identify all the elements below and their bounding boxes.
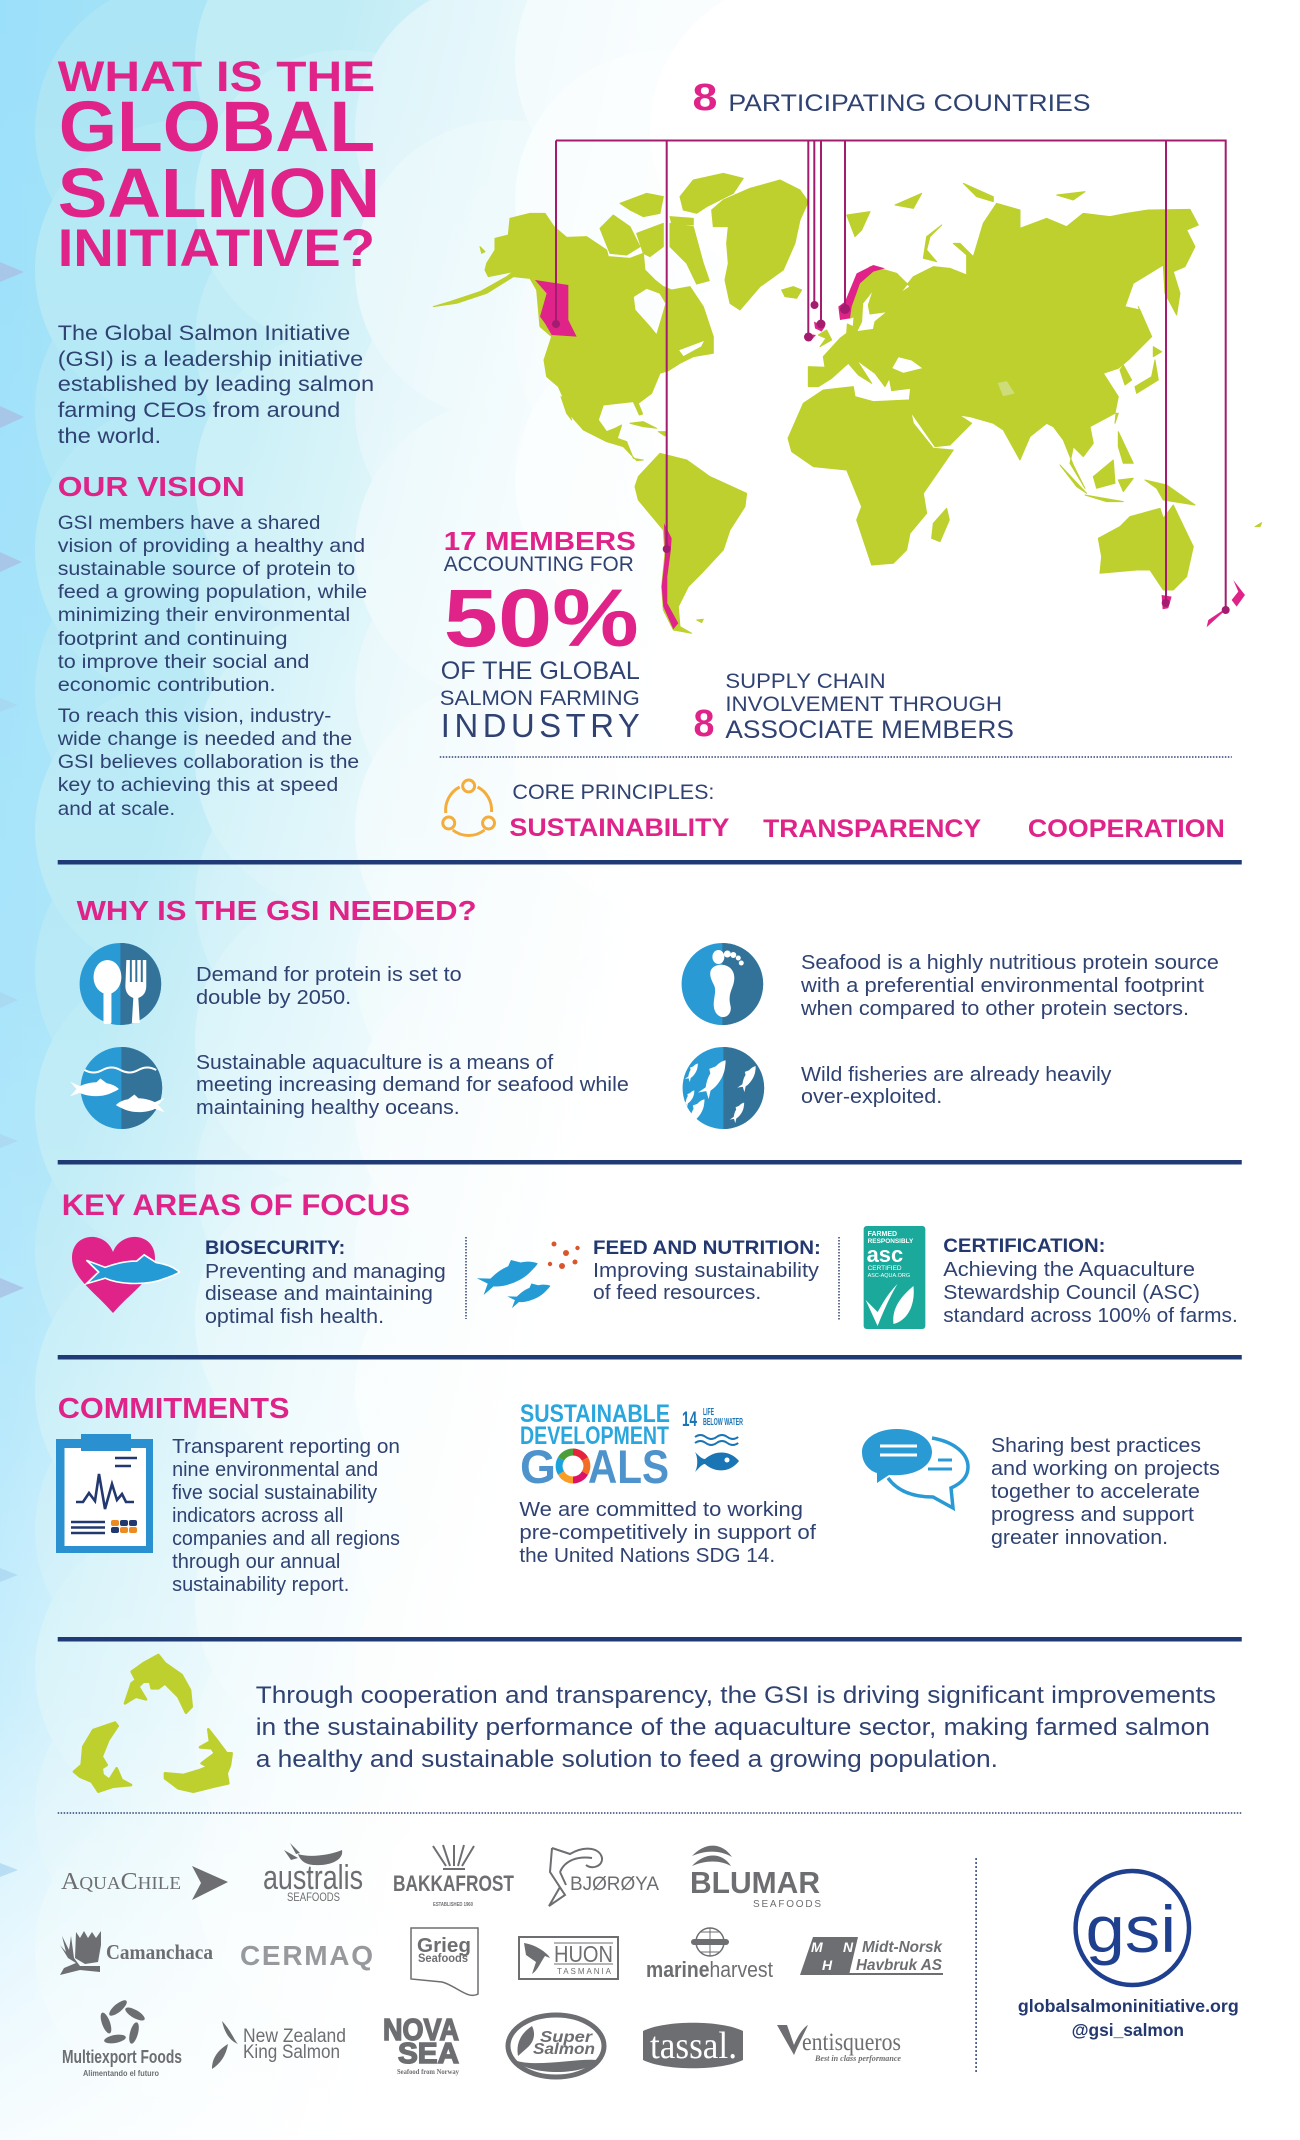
text: biosecurity: disease and maintaining bbox=[205, 1283, 433, 1305]
text: best practices: and working on projects bbox=[991, 1458, 1220, 1480]
logo: sustainable development goals: SUSTAINABLE bbox=[520, 1400, 670, 1428]
map: eurasia africa oceania bbox=[788, 183, 1262, 590]
text: best practices: progress and support bbox=[991, 1504, 1194, 1526]
icon: fish in ocean bbox=[70, 1047, 165, 1129]
core principles: COOPERATION bbox=[1028, 815, 1225, 843]
vision text: To reach this vision, industry- bbox=[58, 706, 331, 727]
icon: recycling salmon bbox=[74, 1655, 232, 1792]
title: GLOBAL bbox=[59, 88, 375, 167]
text: closing statement bbox=[256, 1682, 1216, 1773]
text: demand bbox=[196, 964, 462, 1009]
text: commitments reporting body: through our annual bbox=[172, 1551, 340, 1573]
logo: multiexport foods bbox=[62, 1998, 182, 2078]
core principles bbox=[509, 781, 1225, 843]
logo: super salmon bbox=[508, 2015, 604, 2077]
logo: sustainable development goals: ALS bbox=[588, 1440, 669, 1493]
logo: australis: SEAFOODS bbox=[287, 1890, 340, 1904]
vision text: economic contribution. bbox=[58, 675, 276, 696]
logo: midt-norsk havbruk bbox=[800, 1937, 943, 1975]
logo: sustainable development goals: DEVELOPMENT bbox=[520, 1422, 669, 1450]
icon: core principles ring bbox=[443, 780, 495, 836]
logo: bakkafrost: BAKKAFROST bbox=[393, 1871, 514, 1896]
text: aquaculture: meeting increasing demand for seafood while bbox=[196, 1074, 629, 1096]
icon: asc label bbox=[864, 1226, 925, 1329]
logo: super salmon: Super bbox=[540, 2029, 593, 2046]
intro text: established by leading salmon bbox=[58, 373, 374, 396]
intro text: farming CEOs from around bbox=[58, 399, 340, 422]
title bbox=[58, 53, 380, 278]
icon: fish and feed pellets bbox=[475, 1242, 580, 1308]
logo: new zealand king salmon: New Zealand bbox=[243, 2026, 346, 2047]
heading: why is the gsi needed: WHY IS THE GSI NEEDED? bbox=[77, 895, 477, 926]
text: wild fisheries bbox=[801, 1064, 1111, 1108]
statistic: 8 associate members: INVOLVEMENT THROUGH bbox=[725, 693, 1002, 716]
logo: midt-norsk havbruk: H bbox=[822, 1957, 833, 1973]
logo: blumar: BLUMAR bbox=[690, 1865, 820, 1900]
heading: our vision: OUR VISION bbox=[58, 471, 245, 502]
participating countries heading: PARTICIPATING COUNTRIES bbox=[728, 90, 1091, 117]
logo: huon bbox=[519, 1937, 618, 1979]
heading: key areas of focus: KEY AREAS OF FOCUS bbox=[62, 1189, 410, 1222]
logo: aquachile bbox=[61, 1866, 228, 1900]
logo: tassal: tassal. bbox=[650, 2025, 737, 2067]
vision text: vision of providing a healthy and bbox=[58, 536, 365, 557]
participating countries heading: 8 bbox=[693, 77, 717, 119]
vision text: minimizing their environmental bbox=[58, 605, 350, 626]
icon: spoon and fork bbox=[80, 943, 161, 1025]
map: americas bbox=[433, 173, 808, 633]
text: best practices bbox=[991, 1435, 1220, 1549]
title: INITIATIVE? bbox=[58, 219, 375, 278]
map: highlighted member regions bbox=[535, 265, 1245, 629]
vision text: sustainable source of protein to bbox=[58, 559, 355, 580]
text: sdg commitment: We are committed to working bbox=[519, 1499, 803, 1521]
text: commitments reporting body: sustainability report. bbox=[172, 1574, 349, 1596]
logo: new zealand king salmon bbox=[212, 2021, 346, 2069]
vision text: footprint and continuing bbox=[58, 629, 288, 650]
text: closing statement: Through cooperation and transparency, the GSI is driving significant improvements bbox=[256, 1682, 1216, 1709]
text: seafood: with a preferential environmental footprint bbox=[800, 975, 1204, 997]
logo: huon: HUON bbox=[554, 1941, 613, 1967]
logo: sustainable development goals: 14 bbox=[682, 1408, 697, 1431]
map: pin lines bbox=[552, 140, 1230, 614]
logo: camanchaca bbox=[60, 1931, 213, 1975]
logo: grieg seafood bbox=[411, 1928, 478, 1995]
text: aquaculture bbox=[196, 1052, 629, 1119]
contact details: @gsi_salmon bbox=[1072, 2020, 1184, 2040]
logo: nova sea bbox=[383, 2012, 459, 2076]
vision text: GSI believes collaboration is the bbox=[58, 752, 359, 773]
text: commitments reporting body bbox=[172, 1436, 400, 1596]
vision text: wide change is needed and the bbox=[57, 729, 352, 750]
vision text: feed a growing population, while bbox=[58, 582, 367, 603]
logo: australis bbox=[263, 1843, 363, 1904]
logo: nova sea: Seafood from Norway bbox=[397, 2068, 459, 2076]
member logos bbox=[60, 1843, 943, 2078]
text: demand: double by 2050. bbox=[196, 987, 351, 1009]
text: certification: standard across 100% of farms. bbox=[943, 1305, 1238, 1327]
vision text: and at scale. bbox=[58, 799, 175, 820]
icon: asc label: asc bbox=[867, 1242, 903, 1267]
text: feed and nutrition bbox=[593, 1238, 821, 1304]
text: commitments reporting body: indicators across all bbox=[172, 1505, 343, 1527]
logo: blumar bbox=[690, 1846, 821, 1910]
contact details bbox=[1018, 1996, 1239, 2040]
statistic: 8 associate members: 8 bbox=[694, 703, 714, 745]
text: sdg commitment bbox=[519, 1499, 816, 1567]
logo: grieg seafood: Seafoods bbox=[418, 1951, 468, 1965]
logo: grieg seafood: Grieg bbox=[417, 1935, 471, 1957]
text: seafood: when compared to other protein sectors. bbox=[800, 998, 1189, 1020]
logo: midt-norsk havbruk: N bbox=[843, 1939, 854, 1955]
icon: footprint bbox=[682, 943, 763, 1025]
vision text: GSI members have a shared bbox=[58, 513, 320, 534]
logo: bjoroya: BJØRØYA bbox=[570, 1874, 659, 1895]
text: certification: Stewardship Council (ASC) bbox=[943, 1282, 1200, 1304]
icon: speech bubbles bbox=[862, 1429, 968, 1508]
icon: asc label: ASC-AQUA.ORG bbox=[868, 1273, 910, 1279]
logo: new zealand king salmon: King Salmon bbox=[243, 2042, 340, 2063]
core principles: SUSTAINABILITY bbox=[509, 814, 730, 842]
text: closing statement: in the sustainability performance of the aquaculture sector, making farmed salmon bbox=[256, 1714, 1210, 1741]
intro text: (GSI) is a leadership initiative bbox=[58, 348, 363, 371]
intro text bbox=[58, 322, 374, 448]
statistic: 17 members 50 percent bbox=[440, 528, 640, 744]
contact details: globalsalmoninitiative.org bbox=[1018, 1996, 1239, 2016]
logo: ventisqueros bbox=[777, 2025, 901, 2063]
text: commitments reporting body: five social sustainability bbox=[172, 1482, 377, 1504]
intro text: the world. bbox=[58, 425, 161, 448]
logo: ventisqueros: entisqueros bbox=[802, 2029, 901, 2056]
text: biosecurity: Preventing and managing bbox=[205, 1261, 446, 1283]
logo: cermaq: CERMAQ bbox=[240, 1940, 373, 1971]
statistic: 17 members 50 percent: ACCOUNTING FOR bbox=[444, 553, 634, 576]
heading: commitments: COMMITMENTS bbox=[58, 1393, 290, 1425]
intro text: The Global Salmon Initiative bbox=[58, 322, 350, 345]
logo: nova sea: SEA bbox=[398, 2038, 459, 2070]
icon: asc label: CERTIFIED bbox=[868, 1265, 902, 1272]
logo: bjoroya bbox=[549, 1848, 659, 1906]
logo: nova sea: NOVA bbox=[383, 2012, 459, 2047]
text: seafood bbox=[800, 952, 1219, 1020]
text: commitments reporting body: nine environmental and bbox=[172, 1459, 378, 1481]
statistic: 17 members 50 percent: OF THE GLOBAL bbox=[441, 657, 640, 685]
vision text: to improve their social and bbox=[58, 652, 309, 673]
core principles: TRANSPARENCY bbox=[763, 815, 981, 843]
statistic: 17 members 50 percent: 17 MEMBERS bbox=[444, 528, 636, 556]
logo: super salmon: Salmon bbox=[533, 2041, 595, 2058]
logo: multiexport foods: Multiexport Foods bbox=[62, 2047, 182, 2067]
text: wild fisheries: over-exploited. bbox=[801, 1086, 942, 1108]
text: aquaculture: maintaining healthy oceans. bbox=[196, 1097, 460, 1119]
icon: school of fish bbox=[681, 1047, 764, 1129]
text: wild fisheries: Wild fisheries are already heavily bbox=[801, 1064, 1111, 1086]
statistic: 17 members 50 percent: 50% bbox=[444, 573, 639, 664]
text: biosecurity bbox=[205, 1238, 446, 1328]
text: biosecurity: optimal fish health. bbox=[205, 1306, 384, 1328]
world map bbox=[433, 140, 1262, 633]
vision text: key to achieving this at speed bbox=[58, 775, 338, 796]
logo: gsi: gsi bbox=[1086, 1892, 1176, 1966]
logo: marine harvest: marineharvest bbox=[646, 1957, 773, 1982]
text: feed and nutrition: of feed resources. bbox=[593, 1282, 761, 1304]
participating countries heading bbox=[693, 77, 1091, 119]
logo: blumar: SEAFOODS bbox=[753, 1899, 821, 1910]
logo: midt-norsk havbruk: Havbruk AS bbox=[856, 1957, 942, 1974]
logo: midt-norsk havbruk: M bbox=[811, 1939, 823, 1955]
icon: asc label: FARMED bbox=[868, 1231, 897, 1238]
icon: clipboard report bbox=[56, 1434, 153, 1553]
text: demand: Demand for protein is set to bbox=[196, 964, 462, 986]
logo: australis: australis bbox=[263, 1859, 363, 1897]
title: SALMON bbox=[58, 154, 380, 232]
text: commitments reporting body: Transparent reporting on bbox=[172, 1436, 400, 1458]
logo: gsi bbox=[1075, 1871, 1189, 1985]
logo: ventisqueros: Best in class performance bbox=[814, 2054, 901, 2063]
title: WHAT IS THE bbox=[58, 53, 375, 101]
logo: sustainable development goals: G bbox=[520, 1440, 556, 1493]
logo: huon: TASMANIA bbox=[557, 1967, 612, 1976]
logo: aquachile: AQUACHILE bbox=[61, 1869, 181, 1895]
text: certification: Achieving the Aquaculture bbox=[943, 1259, 1195, 1281]
text: biosecurity: BIOSECURITY: bbox=[205, 1238, 345, 1259]
logo: sustainable development goals bbox=[520, 1400, 743, 1493]
logo: bakkafrost bbox=[393, 1845, 514, 1908]
statistic: 8 associate members: ASSOCIATE MEMBERS bbox=[725, 716, 1014, 744]
logo: sustainable development goals: LIFE bbox=[703, 1407, 714, 1418]
text: best practices: Sharing best practices bbox=[991, 1435, 1201, 1457]
text: sdg commitment: the United Nations SDG 14. bbox=[519, 1545, 775, 1567]
icon: asc label: RESPONSIBLY bbox=[868, 1238, 914, 1245]
logo: midt-norsk havbruk: Midt-Norsk bbox=[862, 1939, 943, 1956]
text: best practices: greater innovation. bbox=[991, 1527, 1168, 1549]
statistic: 17 members 50 percent: INDUSTRY bbox=[441, 707, 640, 744]
text: certification bbox=[943, 1236, 1238, 1327]
icon: heart with fish bbox=[72, 1237, 180, 1313]
text: closing statement: a healthy and sustainable solution to feed a growing population. bbox=[256, 1746, 998, 1773]
statistic: 17 members 50 percent: SALMON FARMING bbox=[440, 687, 640, 710]
text: feed and nutrition: Improving sustainability bbox=[593, 1260, 819, 1282]
statistic: 8 associate members: SUPPLY CHAIN bbox=[725, 670, 886, 693]
text: commitments reporting body: companies and all regions bbox=[172, 1528, 400, 1550]
text: best practices: together to accelerate bbox=[991, 1481, 1200, 1503]
text: feed and nutrition: FEED AND NUTRITION: bbox=[593, 1238, 821, 1259]
text: aquaculture: Sustainable aquaculture is a means of bbox=[196, 1052, 554, 1074]
core principles: CORE PRINCIPLES: bbox=[512, 781, 714, 804]
statistic: 8 associate members bbox=[694, 670, 1014, 745]
logo: multiexport foods: Alimentando el futuro bbox=[83, 2069, 159, 2078]
logo: bakkafrost: ESTABLISHED 1960 bbox=[433, 1902, 473, 1908]
logo: camanchaca: Camanchaca bbox=[106, 1940, 213, 1964]
text: certification: CERTIFICATION: bbox=[943, 1236, 1105, 1257]
vision text bbox=[57, 513, 367, 820]
logo: sustainable development goals: BELOW WATER bbox=[703, 1417, 743, 1428]
text: seafood: Seafood is a highly nutritious protein source bbox=[801, 952, 1219, 974]
text: sdg commitment: pre-competitively in support of bbox=[519, 1522, 816, 1544]
logo: marine harvest bbox=[646, 1928, 773, 1982]
